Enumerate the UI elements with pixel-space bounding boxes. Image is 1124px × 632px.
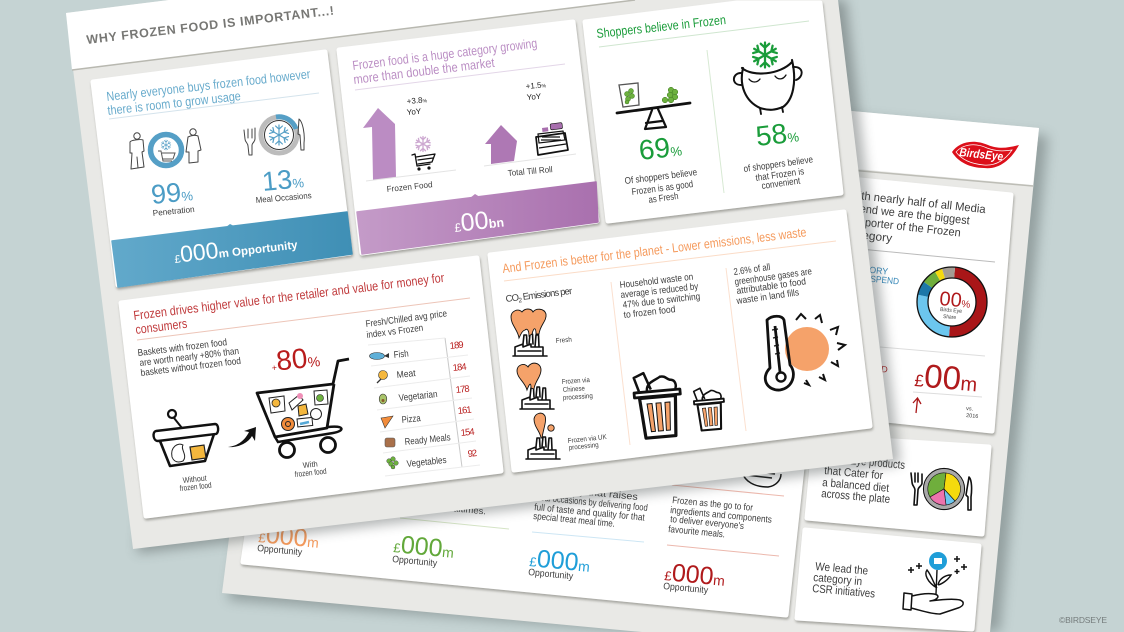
panel: value [121, 258, 501, 516]
text: household waste [619, 272, 701, 321]
row: Pizza 161 [381, 405, 472, 428]
plate text [821, 453, 906, 506]
column text: fourth [668, 495, 773, 540]
label: +1.5% YoY: +1.5% [525, 80, 547, 91]
arrow: frozen food growth [363, 108, 396, 180]
heading: Shoppers believe in Frozen [596, 12, 727, 41]
label: with frozen food [294, 459, 327, 479]
stat: media value: £00m [913, 356, 979, 398]
stat: 99% penetration: 99% [150, 176, 194, 210]
text: baskets: Baskets with frozen food [137, 337, 228, 359]
label: Frozen via Chinese processing: Chinese [563, 385, 585, 394]
arrow: basket to cart [228, 427, 256, 447]
media statement [846, 189, 987, 245]
label: Frozen via UK processing [567, 434, 607, 452]
icon: shoppers and cart [130, 129, 201, 169]
panel: category growth [339, 22, 598, 254]
text: household waste: Household waste on [619, 272, 694, 291]
logo: Birds Eye: BirdsEye [959, 145, 1004, 164]
stat: green opportunity: £000m [392, 530, 455, 564]
text: household waste: to frozen food [623, 304, 676, 321]
heading: And Frozen is better for the planet - Lower emissions, less waste [502, 224, 807, 276]
donut chart: Birds Eye share: 00% [939, 288, 972, 313]
heading: more than double the market [353, 55, 496, 87]
icon: happy pot with snowflake [734, 42, 802, 114]
stat: red opportunity: £000m [663, 558, 726, 592]
heading: Nearly everyone buys frozen food however [106, 66, 312, 104]
panel: four opportunities [243, 380, 805, 615]
row: Fish 189: Fish [393, 348, 409, 361]
CSR text: category in [813, 572, 863, 588]
panel: media spend: D [881, 364, 889, 375]
front sheet [66, 0, 900, 553]
column text: third [533, 482, 648, 530]
stat: blue opportunity: Opportunity [528, 567, 574, 582]
label: Frozen via UK processing: processing [568, 442, 599, 452]
text: baskets: are worth nearly +80% than [139, 346, 240, 369]
table: price index [365, 308, 480, 476]
row: Ready Meals 154: Ready Meals [404, 432, 451, 448]
column text: fourth: Frozen as the go to for [672, 495, 753, 514]
table: price index: index vs Frozen [366, 323, 424, 341]
text: baskets [137, 337, 242, 379]
donut chart: Birds Eye share: Share [943, 314, 956, 321]
back sheet [222, 60, 1048, 632]
label: +1.5% YoY [525, 80, 547, 102]
label: without frozen food: Without [182, 473, 208, 485]
row: Vegetarian 178 [379, 384, 470, 404]
stat: red opportunity: Opportunity [663, 581, 709, 596]
icon: full cart [257, 359, 349, 458]
text: as good as fresh: Frozen is as good [631, 179, 694, 198]
band: category value [357, 182, 598, 254]
row: Vegetables 92 [387, 448, 478, 470]
label: without frozen food: frozen food [179, 481, 212, 493]
plate text: across the plate [821, 488, 891, 506]
row: Ready Meals 154 [385, 427, 475, 448]
label: category media spend [840, 262, 900, 286]
panel: media spend [818, 178, 1011, 431]
icon: Chinese processing factory [517, 363, 554, 409]
icon: bowl [742, 471, 781, 487]
text: as good as fresh: Of shoppers believe [624, 167, 698, 187]
text: convenient: that Frozen is [755, 166, 805, 184]
label: Frozen via Chinese processing [562, 377, 593, 402]
stat: 58%: 58% [754, 116, 801, 152]
column text: fourth: to deliver everyone's [670, 514, 745, 532]
icon: up arrow [913, 398, 921, 413]
arrow: total till roll growth [485, 125, 517, 164]
label: +3.8% YoY: +3.8% [406, 95, 428, 106]
text: CO2 emissions: Emissions per [520, 286, 573, 303]
text: CO2 emissions: CO [505, 292, 520, 305]
label: Frozen Food: Frozen Food [386, 179, 433, 194]
label: +3.8% YoY [406, 95, 428, 117]
media statement: category [846, 228, 893, 245]
stat: 13% meal occasions: 13% [261, 163, 305, 197]
label: Frozen via UK processing: Frozen via UK [567, 434, 607, 445]
icon: thermometer and sun [765, 314, 845, 390]
stat: 13% meal occasions [255, 163, 312, 205]
label: with frozen food: With [302, 459, 318, 470]
band: opportunity: £000m Opportunity [173, 227, 299, 268]
label: Frozen via Chinese processing: Frozen via [562, 377, 590, 386]
text: CO2 emissions: 2 [518, 297, 523, 304]
label: without frozen food [179, 473, 212, 493]
label: +3.8% YoY: YoY [406, 107, 422, 117]
label: versus 2016: 2016 [966, 413, 979, 420]
panel: balanced plate [807, 436, 989, 534]
heading: consumers [135, 316, 188, 337]
panel: shoppers believe [585, 3, 841, 221]
plate text: a balanced diet [822, 477, 890, 495]
text: as good as fresh: as Fresh [648, 191, 679, 206]
text: greenhouse gases: attributable to food [736, 276, 807, 297]
row: Pizza 161: 161 [457, 405, 472, 417]
panel: penetration [93, 52, 352, 287]
text: greenhouse gases: greenhouse gases are [734, 266, 813, 288]
label: versus 2016 [966, 406, 979, 420]
text: greenhouse gases [733, 262, 813, 307]
icon: UK processing factory [526, 413, 560, 459]
title: WHY FROZEN FOOD IS IMPORTANT...! [86, 4, 335, 47]
row: Fish 189 [370, 340, 464, 361]
media statement: supporter of the Frozen [847, 215, 961, 239]
heading [133, 270, 446, 337]
row: Meat 184: Meat [396, 368, 417, 381]
CSR text: We lead the [815, 561, 869, 578]
icon: fresh factory [511, 309, 547, 356]
row: Vegetables 92: 92 [467, 448, 478, 460]
column text: second: mealtimes. [440, 502, 487, 516]
stat: +80%: +80% [269, 341, 321, 377]
icon: balanced plate [911, 468, 972, 510]
row: Pizza 161: Pizza [401, 413, 422, 426]
row: Fish 189: 189 [449, 340, 464, 352]
label: Total Till Roll: Total Till Roll [507, 164, 553, 178]
row: Vegetables 92: Vegetables [406, 455, 447, 470]
column text: third: A category that raises [534, 482, 639, 503]
row: Ready Meals 154: 154 [460, 427, 475, 439]
text: greenhouse gases: 2.6% of all [733, 262, 771, 278]
donut chart: Birds Eye share [917, 267, 987, 337]
back sheet header [283, 60, 1039, 185]
panel: CSR [797, 530, 979, 629]
media statement: spend we are the biggest [848, 202, 971, 227]
CSR text [812, 561, 876, 600]
row: Vegetarian 178: 178 [455, 384, 470, 396]
icon: frozen cart [412, 136, 435, 171]
heading: there is room to grow usage [107, 88, 241, 118]
table: price index: Fresh/Chilled avg price [365, 308, 448, 330]
stat: 69%: 69% [637, 130, 684, 166]
icon: small bin [693, 386, 726, 431]
text: convenient [743, 154, 814, 192]
heading: Frozen drives higher value for the retailer and value for money for [133, 270, 446, 323]
text: greenhouse gases: waste in land fills [735, 287, 800, 307]
row: Vegetarian 178: Vegetarian [398, 389, 438, 404]
row: Meat 184 [377, 362, 467, 383]
copyright: ©BIRDSEYE [1059, 615, 1107, 625]
text: household waste: 47% due to switching [622, 291, 701, 311]
stat: orange opportunity: Opportunity [257, 543, 303, 558]
text: convenient: convenient [761, 176, 801, 192]
stat: 99% penetration: Penetration [152, 204, 195, 218]
label: +1.5% YoY: YoY [526, 92, 542, 102]
text: household waste: average is reduced by [620, 281, 699, 301]
plate text: that Cater for [824, 465, 884, 482]
stat: green opportunity: Opportunity [392, 554, 438, 569]
icon: basket [154, 410, 218, 466]
icon: scales with peas [617, 83, 690, 129]
band: category value: £00bn [453, 205, 505, 238]
text: baskets: baskets without frozen food [140, 356, 242, 379]
label: category media spend: CATEGORY [840, 262, 889, 277]
stat: blue opportunity: £000m [528, 544, 591, 578]
band: opportunity [112, 212, 352, 287]
heading [106, 66, 312, 118]
icon: cash register [536, 123, 568, 155]
label: category media spend: MEDIA SPEND [842, 271, 900, 286]
stat: 13% meal occasions: Meal Occasions [255, 190, 312, 205]
panel: planet [490, 212, 870, 470]
heading: Frozen food is a huge category growing [352, 35, 538, 73]
media statement: With nearly half of all Media [848, 189, 987, 216]
label: Frozen via Chinese processing: processing [563, 393, 593, 402]
header band [66, 0, 635, 70]
label: Fresh: Fresh [556, 337, 572, 345]
text: convenient: of shoppers believe [743, 154, 814, 175]
stat: orange opportunity: £000m [257, 520, 320, 554]
donut chart: Birds Eye share: Birds Eye [940, 307, 962, 315]
text: as good as fresh [624, 167, 698, 206]
plate text: Birds Eye products [826, 453, 906, 472]
label: versus 2016: vs. [966, 406, 974, 413]
column text: third: special treat meal time. [533, 511, 615, 530]
column text: fourth: favourite meals. [668, 524, 726, 540]
column text: fourth: ingredients and components [670, 505, 773, 526]
icon: plate and snowflake [244, 117, 304, 155]
icon: large bin [632, 370, 684, 439]
CSR text: CSR initiatives [812, 583, 876, 600]
column text: third: full of taste and quality for that [534, 502, 646, 524]
row: Meat 184: 184 [452, 362, 467, 374]
heading [352, 35, 538, 87]
column text: third: meal occasions by delivering food [534, 492, 648, 514]
icon: hand holding plant [903, 552, 967, 614]
label: with frozen food: frozen food [294, 467, 327, 479]
logo: Birds Eye [952, 142, 1019, 168]
